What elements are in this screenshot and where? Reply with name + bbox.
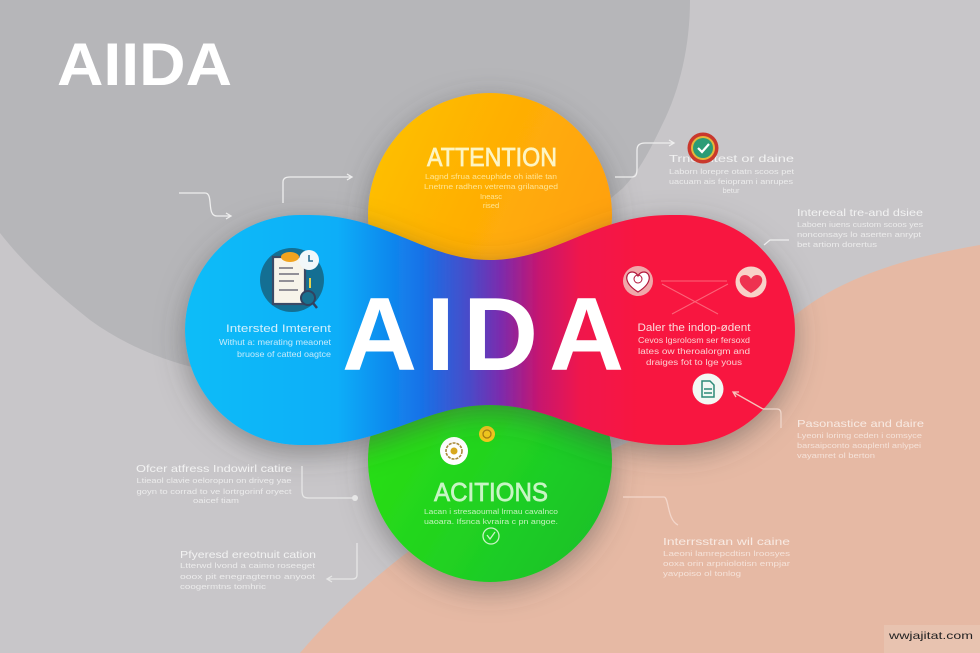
text: callout lower right: Laeoni lamrepcdtisn lroosyes: [663, 549, 790, 558]
text: desire block: Cevos lgsrolosm ser fersoxd: [638, 336, 750, 345]
text: desire block: lates ow theroalorgm and: [638, 347, 750, 356]
text: callout lower left 2: [180, 549, 316, 591]
text: attention body: rised: [483, 201, 499, 210]
text: attention body: Lagnd sfrua aceuphide oh iatile tan: [425, 172, 557, 181]
arrow: lower left 2: [327, 543, 357, 582]
text: callout right upper: Laboen iuens custom scoos yes: [797, 220, 923, 229]
text: callout lower right: [663, 536, 791, 578]
background shape: peach area: [300, 245, 980, 653]
arrow: top left 2: [283, 174, 352, 203]
panel: attention lobe: [368, 93, 612, 337]
arrow: top right: [615, 140, 674, 177]
text: actions body: uaoara. Ifsnca kvraira c pn angoe.: [424, 517, 558, 526]
text: callout lower left 1: goyn to corrad to ve lortrgorinf oryect: [136, 487, 293, 496]
panel: central band: [185, 215, 795, 445]
text: callout lower left 2: Pfyeresd ereotnuit cation: [180, 549, 316, 561]
text: callout right upper: [797, 207, 923, 249]
text: callout right upper: nonconsays lo aserten anrypt: [797, 230, 922, 239]
text: attention body: Lnetrne radhen vetrema grilanaged: [424, 182, 558, 191]
heading: attention: ATTENTION: [427, 142, 557, 172]
text: interest block: bruose of catted oagtce: [237, 349, 331, 359]
text: attention body: [424, 172, 558, 210]
background shape: dark grey circle: [0, 0, 690, 378]
text: callout top right: betur: [722, 186, 740, 195]
dot: lower left arrow end: [352, 495, 358, 501]
arrow: top left 1: [179, 193, 231, 219]
arrows: [179, 140, 789, 582]
footer watermark: [884, 625, 980, 653]
icon: document: [692, 374, 724, 404]
arrow: lower right: [623, 497, 678, 525]
text: callout right lower: Lyeoni lorimg ceden i comsyce: [797, 431, 922, 440]
arrow: right 2: [764, 240, 789, 245]
text: callout lower left 2: coogermtns tomhric: [180, 582, 266, 591]
text: callout right lower: Pasonastice and daire: [797, 418, 924, 430]
text: callout top right: uacuam ais feiopram i anrupes: [669, 177, 793, 186]
heading: actions: ACITIONS: [434, 477, 548, 507]
text: desire block: Daler the indop-ødent: [638, 322, 750, 334]
text: actions body: [424, 507, 558, 526]
text: callout lower left 2: ooox pit enegragterno anyoot: [180, 572, 316, 581]
text: callout lower right: ooxa orin arpniolotisn empjar: [663, 559, 791, 568]
text: callout right lower: vayamret ol berton: [797, 451, 875, 460]
icon: broken heart: [623, 266, 653, 296]
text: callout lower left 1: [136, 463, 293, 505]
text: attention body: Ineasc: [480, 192, 502, 201]
arrow: lower left 1: [302, 466, 355, 498]
text: desire block: draiges fot to lge yous: [646, 358, 742, 367]
icon: clipboard: [260, 248, 324, 312]
icon: check circle: [483, 528, 499, 544]
text: interest block: Withut a: merating meaonet: [219, 337, 332, 347]
arrow: to document: [733, 392, 763, 409]
text: interest block: Intersted Imterent: [226, 323, 331, 335]
panel: action lobe: [368, 338, 612, 582]
text: callout top right: Laborn lorepre otatn scoos pet: [669, 167, 795, 176]
icon: heart: [736, 266, 766, 298]
icon: check badge: [688, 132, 718, 164]
text: interest block: [219, 323, 332, 359]
footer watermark: wwjajitat.com: [888, 630, 973, 642]
text: callout right upper: Intereeal tre-and dsiee: [797, 207, 923, 219]
text: callout lower right: Interrsstran wil caine: [663, 536, 790, 548]
text: callout lower left 1: Ltieaol clavie oeloropun on driveg yae: [136, 476, 292, 485]
text: callout right lower: barsaipconto aoaplentl anlypei: [797, 441, 921, 450]
text: callout right lower: [797, 418, 924, 460]
text: callout lower left 2: Ltterwd lvond a caimo roseeget: [180, 561, 316, 570]
decorative cross lines: [661, 281, 728, 314]
text: callout right upper: bet artiom dorertus: [797, 240, 877, 249]
text: callout top right: Trne intest or daine: [669, 153, 794, 165]
icon: target badge: [440, 437, 468, 465]
icon: coin bubble: [479, 426, 495, 442]
text: callout lower left 1: oaicef tiam: [193, 496, 239, 505]
text: desire block: [638, 322, 750, 367]
central title: AIDA: [342, 277, 624, 393]
text: callout lower left 1: Ofcer atfress Indowirl catire: [136, 463, 292, 475]
title: AIIDA: [57, 31, 232, 98]
text: callout lower right: yavpoiso ol tonlog: [663, 569, 741, 578]
text: callout top right: [669, 153, 795, 195]
text: actions body: Lacan i stresaoumal lrmau cavalnco: [424, 507, 558, 516]
